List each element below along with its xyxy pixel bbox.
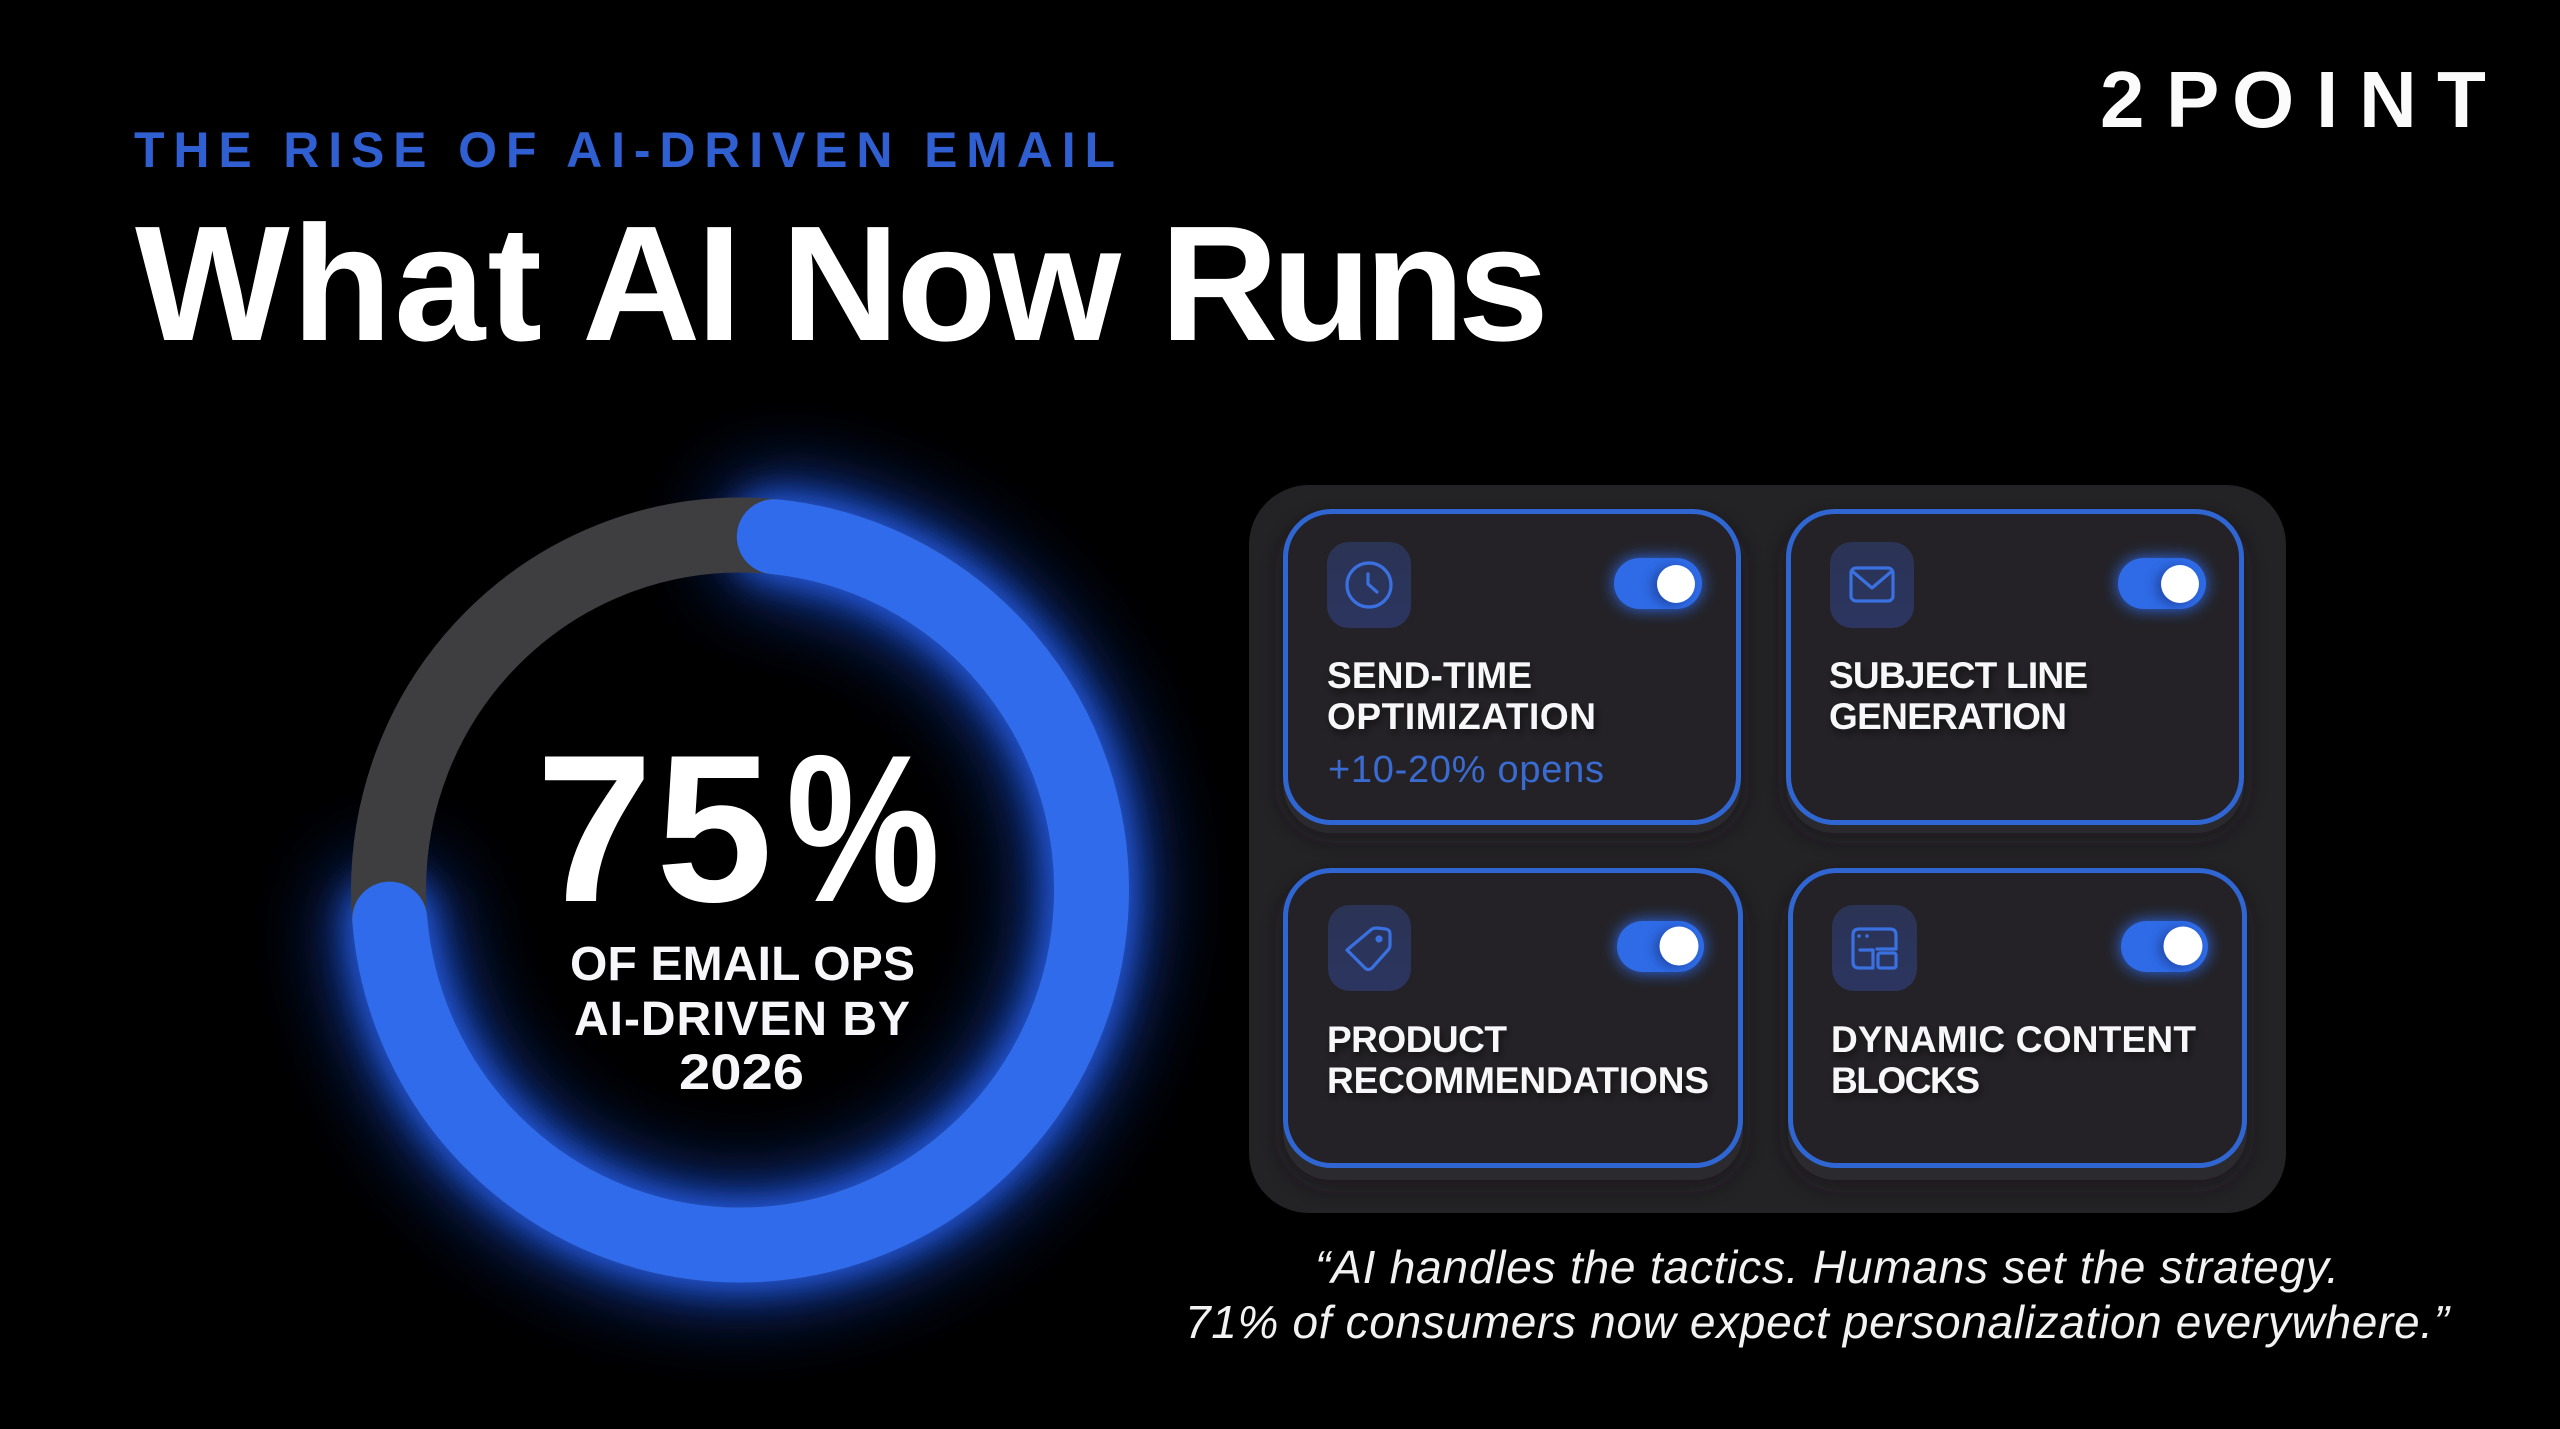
card metric: +10-20% opens [1328, 749, 1604, 791]
donut glow [390, 537, 1092, 1245]
title [135, 192, 1549, 375]
donut caption: AI-DRIVEN BY [574, 993, 910, 1046]
card label [1327, 655, 1596, 737]
title: AI [582, 192, 742, 375]
donut caption: OF EMAIL OPS [570, 938, 915, 991]
card: subject line generation [1786, 512, 2244, 836]
donut caption [570, 938, 915, 1100]
title: Runs [1160, 192, 1549, 375]
donut chart: 75% [388, 535, 1092, 1245]
toggle on [2121, 921, 2208, 972]
card label: OPTIMIZATION [1327, 696, 1596, 737]
card label [1831, 1019, 2196, 1101]
donut caption: 2026 [679, 1044, 804, 1100]
panel background [1249, 485, 2286, 1213]
card label [1327, 1019, 1709, 1101]
toggle on [2118, 558, 2206, 609]
icon: price tag [1328, 905, 1411, 991]
toggle on [1614, 558, 1702, 609]
icon: layout blocks [1832, 905, 1917, 991]
donut value [536, 711, 940, 946]
icon: clock [1327, 542, 1411, 628]
toggle on [1617, 921, 1704, 972]
eyebrow heading: THE RISE OF AI-DRIVEN EMAIL [134, 122, 1115, 178]
quote [1185, 1241, 2452, 1348]
card label: BLOCKS [1831, 1060, 1980, 1101]
icon: envelope [1830, 542, 1914, 628]
card label: PRODUCT [1327, 1019, 1507, 1060]
quote: 71% of consumers now expect personalization everywhere.” [1185, 1296, 2452, 1348]
quote: “AI handles the tactics. Humans set the strategy. [1315, 1241, 2339, 1293]
card: send-time optimization [1283, 512, 1741, 836]
card label [1829, 655, 2088, 737]
card: product recommendations [1283, 870, 1743, 1185]
donut value arc [390, 537, 1092, 1245]
card label: SUBJECT LINE [1829, 655, 2088, 696]
donut track [388, 535, 1092, 1245]
title: What [135, 192, 542, 375]
card label: DYNAMIC CONTENT [1831, 1019, 2196, 1060]
card label: RECOMMENDATIONS [1327, 1060, 1709, 1101]
donut value: 75 [536, 711, 773, 946]
card label: SEND-TIME [1327, 655, 1532, 696]
card label: GENERATION [1829, 696, 2067, 737]
card: dynamic content blocks [1788, 870, 2247, 1185]
donut value: % [786, 711, 940, 946]
panel: AI features [1249, 485, 2286, 1213]
logo: 2POINT: 2POINT [2100, 55, 2486, 144]
title: Now [781, 192, 1121, 375]
